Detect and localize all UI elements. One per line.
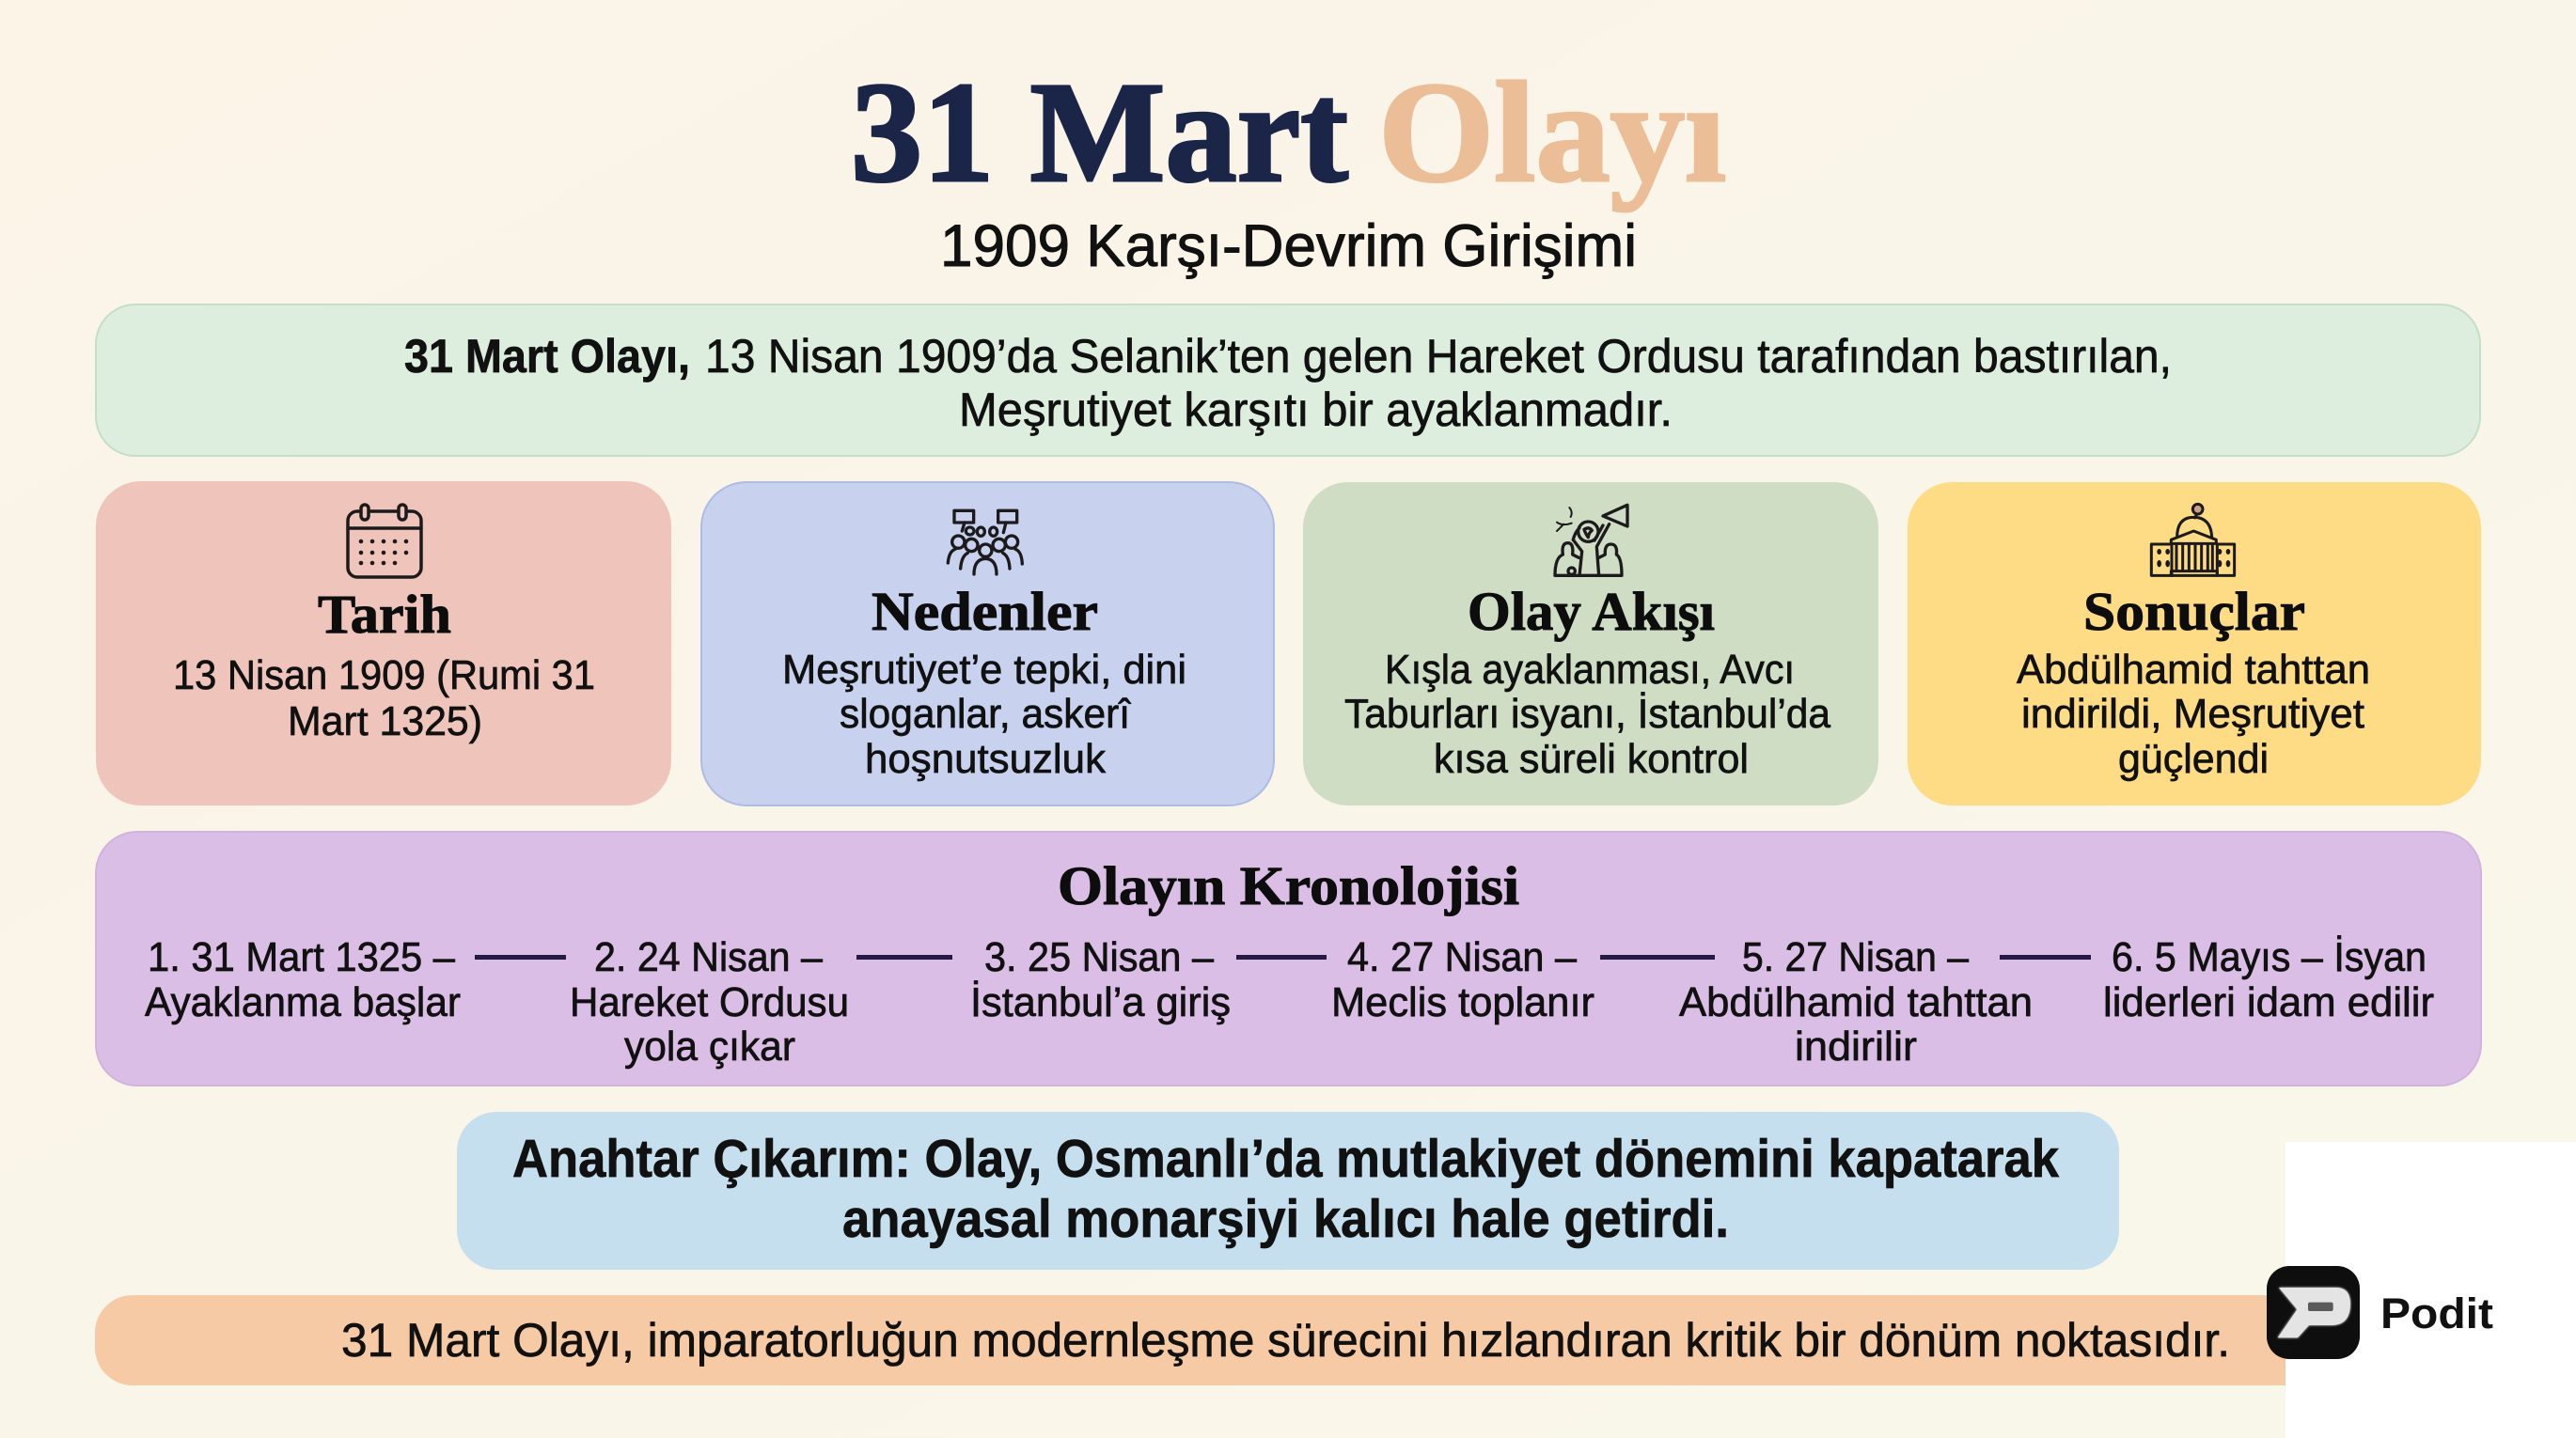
heading: Sonuçlar: Sonuçlar [2083, 581, 2305, 642]
title [851, 54, 1726, 212]
icon: crowd [948, 510, 1022, 574]
timeline event 1 [145, 934, 461, 1025]
panel: Olay Akışı [1303, 482, 1878, 805]
title: 31 Mart [851, 54, 1348, 212]
icon: calendar [348, 505, 421, 577]
text: Olay Akışı body: Kışla ayaklanması, Avcı [1385, 647, 1795, 693]
panel: Tarih [96, 481, 671, 805]
timeline event 1: Ayaklanma başlar [145, 979, 461, 1025]
arrow: connector 2 [856, 955, 952, 960]
timeline event 6: liderleri idam edilir [2103, 979, 2434, 1025]
timeline event 3 [970, 934, 1231, 1025]
subtitle: 1909 Karşı-Devrim Girişimi [940, 213, 1637, 279]
timeline event 3: 3. 25 Nisan – [984, 934, 1214, 980]
arrow: connector 1 [475, 955, 566, 960]
watermark panel [2285, 1142, 2576, 1438]
text: conclusion: 31 Mart Olayı, imparatorluğun modernleşme sürecini hızlandıran kritik bir dönüm noktasıdır. [341, 1314, 2230, 1367]
panel: timeline [96, 832, 2481, 1086]
definition text [404, 330, 2172, 436]
timeline event 2: Hareket Ordusu [570, 979, 849, 1025]
logo: Podit [2267, 1266, 2493, 1359]
text: Sonuçlar body: indirildi, Meşrutiyet [2021, 691, 2364, 737]
text: Sonuçlar body: Abdülhamid tahttan [2017, 647, 2370, 693]
text: Nedenler body: hoşnutsuzluk [865, 736, 1107, 782]
timeline event 2 [570, 934, 849, 1070]
text: Olay Akışı body [1344, 647, 1830, 782]
text: Tarih body [173, 652, 595, 744]
panel: Nedenler [701, 482, 1274, 805]
timeline event 3: İstanbul’a giriş [970, 979, 1231, 1025]
title: Olayı [1378, 54, 1726, 212]
timeline event 5 [1679, 934, 2033, 1070]
timeline event 2: 2. 24 Nisan – [594, 934, 823, 980]
timeline event 6 [2103, 934, 2434, 1025]
text: Nedenler body [782, 647, 1186, 782]
timeline event 2: yola çıkar [624, 1024, 795, 1070]
text: Sonuçlar body: güçlendi [2118, 736, 2269, 782]
panel: key takeaway [457, 1112, 2119, 1270]
icon: parliament building [2151, 504, 2235, 575]
text: key takeaway: anayasal monarşiyi kalıcı hale getirdi. [842, 1189, 1729, 1249]
timeline event 4: Meclis toplanır [1331, 979, 1594, 1025]
text: Nedenler body: sloganlar, askerî [840, 691, 1132, 737]
panel: Sonuçlar [1908, 482, 2481, 805]
text: Tarih body: Mart 1325) [288, 698, 482, 744]
icon: protester with megaphone [1555, 505, 1627, 575]
arrow: connector 3 [1236, 955, 1327, 960]
heading: Olay Akışı: Olay Akışı [1468, 581, 1715, 642]
timeline event 4: 4. 27 Nisan – [1347, 934, 1577, 980]
text: Nedenler body: Meşrutiyet’e tepki, dini [782, 647, 1186, 693]
text: Sonuçlar body [2017, 647, 2370, 782]
timeline event 6: 6. 5 Mayıs – İsyan [2112, 934, 2427, 980]
timeline event 5: indirilir [1795, 1024, 1917, 1070]
panel: definition [96, 305, 2480, 456]
arrow: connector 5 [2000, 955, 2091, 960]
definition text: Meşrutiyet karşıtı bir ayaklanmadır. [959, 383, 1673, 436]
timeline event 1: 1. 31 Mart 1325 – [148, 934, 455, 980]
definition text: 31 Mart Olayı, [404, 330, 690, 383]
heading: Nedenler: Nedenler [872, 581, 1098, 642]
arrow: connector 4 [1600, 955, 1715, 960]
text: key takeaway [512, 1129, 2059, 1249]
timeline event 5: 5. 27 Nisan – [1742, 934, 1969, 980]
definition text: 13 Nisan 1909’da Selanik’ten gelen Hareket Ordusu tarafından bastırılan, [705, 330, 2172, 383]
timeline event 5: Abdülhamid tahttan [1679, 979, 2033, 1025]
icon: Podit logo [2267, 1266, 2360, 1359]
text: Tarih body: 13 Nisan 1909 (Rumi 31 [173, 652, 595, 698]
heading: Tarih: Tarih [318, 584, 451, 645]
text: Podit: Podit [2380, 1290, 2493, 1337]
text: key takeaway: Anahtar Çıkarım: Olay, Osmanlı’da mutlakiyet dönemini kapatarak [512, 1129, 2059, 1189]
heading: timeline: Olayın Kronolojisi [1058, 855, 1519, 916]
text: Olay Akışı body: kısa süreli kontrol [1434, 736, 1749, 782]
panel: conclusion bar [95, 1295, 2351, 1385]
text: Olay Akışı body: Taburları isyanı, İstanbul’da [1344, 691, 1830, 737]
timeline event 4 [1331, 934, 1594, 1025]
